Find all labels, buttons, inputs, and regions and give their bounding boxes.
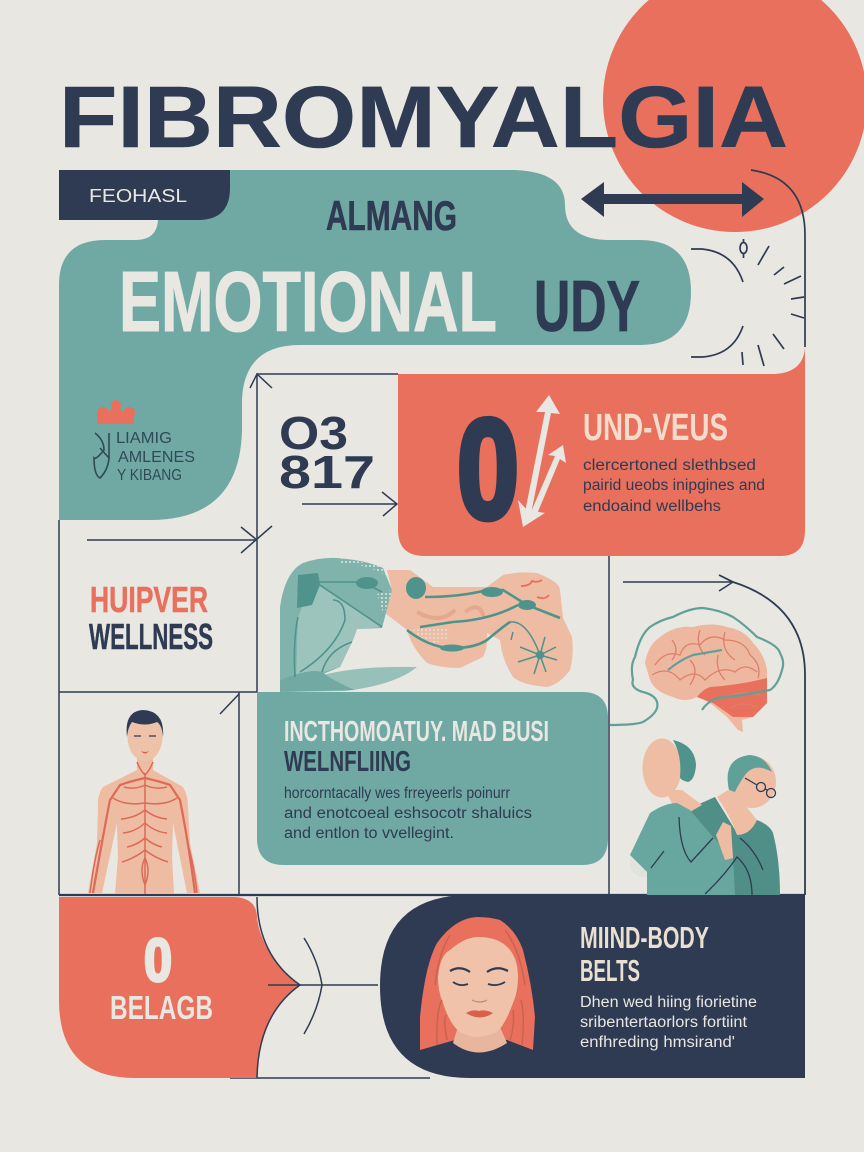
panel: coral belagb: [59, 897, 300, 1078]
icon: crown: [97, 400, 135, 424]
tag: feohasl: [59, 170, 230, 220]
hair: [420, 917, 535, 1050]
caption: [116, 430, 195, 484]
grid lines: [59, 374, 805, 1078]
heading: und-veus: UND-VEUS: [583, 407, 728, 449]
icon: white arrows: [518, 395, 566, 527]
body text: clercertoned slethbsed: [583, 457, 756, 474]
panel: navy mind-body: [380, 895, 805, 1078]
caption: AMLENES: [118, 449, 195, 466]
body text: sribentertaorlors fortiint: [580, 1014, 748, 1031]
heading: almang: ALMANG: [326, 192, 457, 239]
heading: hupver wellness: [89, 579, 213, 657]
text: numbers: O3: [279, 407, 348, 459]
arrow: merge: [257, 897, 378, 1078]
text: belagb: BELAGB: [110, 989, 213, 1026]
tag: feohasl: FEOHASL: [89, 186, 187, 206]
heading: emotional: EMOTIONAL: [119, 255, 497, 350]
leaf: [285, 667, 417, 692]
brows and eyes: [450, 968, 508, 985]
body text: and enotcoeal eshsocotr shaluics: [284, 805, 532, 822]
body text: pairid ueobs inipgines and: [583, 477, 765, 494]
heading: [580, 920, 709, 988]
body text: [284, 785, 532, 842]
body text: enfhreding hmsirand': [580, 1034, 735, 1051]
left person body: [630, 803, 735, 895]
heading: BELTS: [580, 953, 640, 988]
body text: horcorntacally wes frreyeerls poinurr: [284, 785, 510, 802]
heading: [284, 716, 549, 778]
heading: udy: UDY: [534, 267, 640, 347]
illustration: human body: [88, 710, 200, 894]
dotted patches: [340, 558, 388, 577]
icon: zero glyph: 0: [144, 927, 172, 994]
caption: LIAMIG: [116, 430, 172, 447]
icon and small text: teal panel: [94, 400, 195, 484]
coral squiggles: [521, 580, 549, 598]
title: FIBROMYALGIA: [59, 69, 788, 166]
right person head: [728, 756, 776, 808]
hand: [716, 822, 733, 860]
body text: Dhen wed hiing fiorietine: [580, 994, 757, 1011]
text: numbers: [279, 407, 375, 498]
lips: [466, 1010, 493, 1018]
teal nerves: [297, 573, 536, 652]
arcs: [417, 607, 484, 618]
caption: Y KIBANG: [117, 467, 182, 484]
illustration: two people: [630, 738, 780, 895]
icon: radiating light: [691, 170, 805, 366]
panel: coral und-veus: [398, 345, 805, 556]
coral circle top right: [603, 0, 864, 232]
body text: [580, 994, 757, 1051]
body text: endoaind wellbehs: [583, 498, 721, 515]
icon: botanical stem: [94, 433, 109, 478]
left person neck: [665, 790, 702, 812]
small arrows: [87, 374, 733, 714]
panel: teal inchthomoatuy: [257, 692, 608, 865]
neck: [453, 1020, 507, 1052]
heading: INCTHOMOATUY. MAD BUSI: [284, 716, 549, 748]
panel: teal emotional banner: [59, 170, 691, 520]
face: [438, 937, 518, 1037]
hair strands: [435, 930, 525, 1045]
peach body: [385, 570, 573, 687]
teal head: [280, 558, 392, 692]
heading: hupver wellness: WELLNESS: [89, 616, 213, 657]
text: numbers: 817: [279, 446, 375, 498]
neuron star: [518, 637, 557, 674]
right person body: [690, 797, 780, 895]
illustration: brain: [610, 608, 783, 732]
illustration: woman face: [420, 917, 535, 1052]
arrow: double headed: [581, 182, 764, 217]
heading: hupver wellness: HUIPVER: [90, 579, 208, 620]
body text: [583, 457, 765, 515]
heading: MIIND-BODY: [580, 920, 709, 955]
left person head: [642, 738, 682, 798]
illustration: anatomy: [280, 558, 573, 692]
body text: and entlon to vvellegint.: [284, 825, 454, 842]
heading: WELNFLIING: [284, 746, 411, 778]
large zero: 0: [457, 390, 519, 549]
